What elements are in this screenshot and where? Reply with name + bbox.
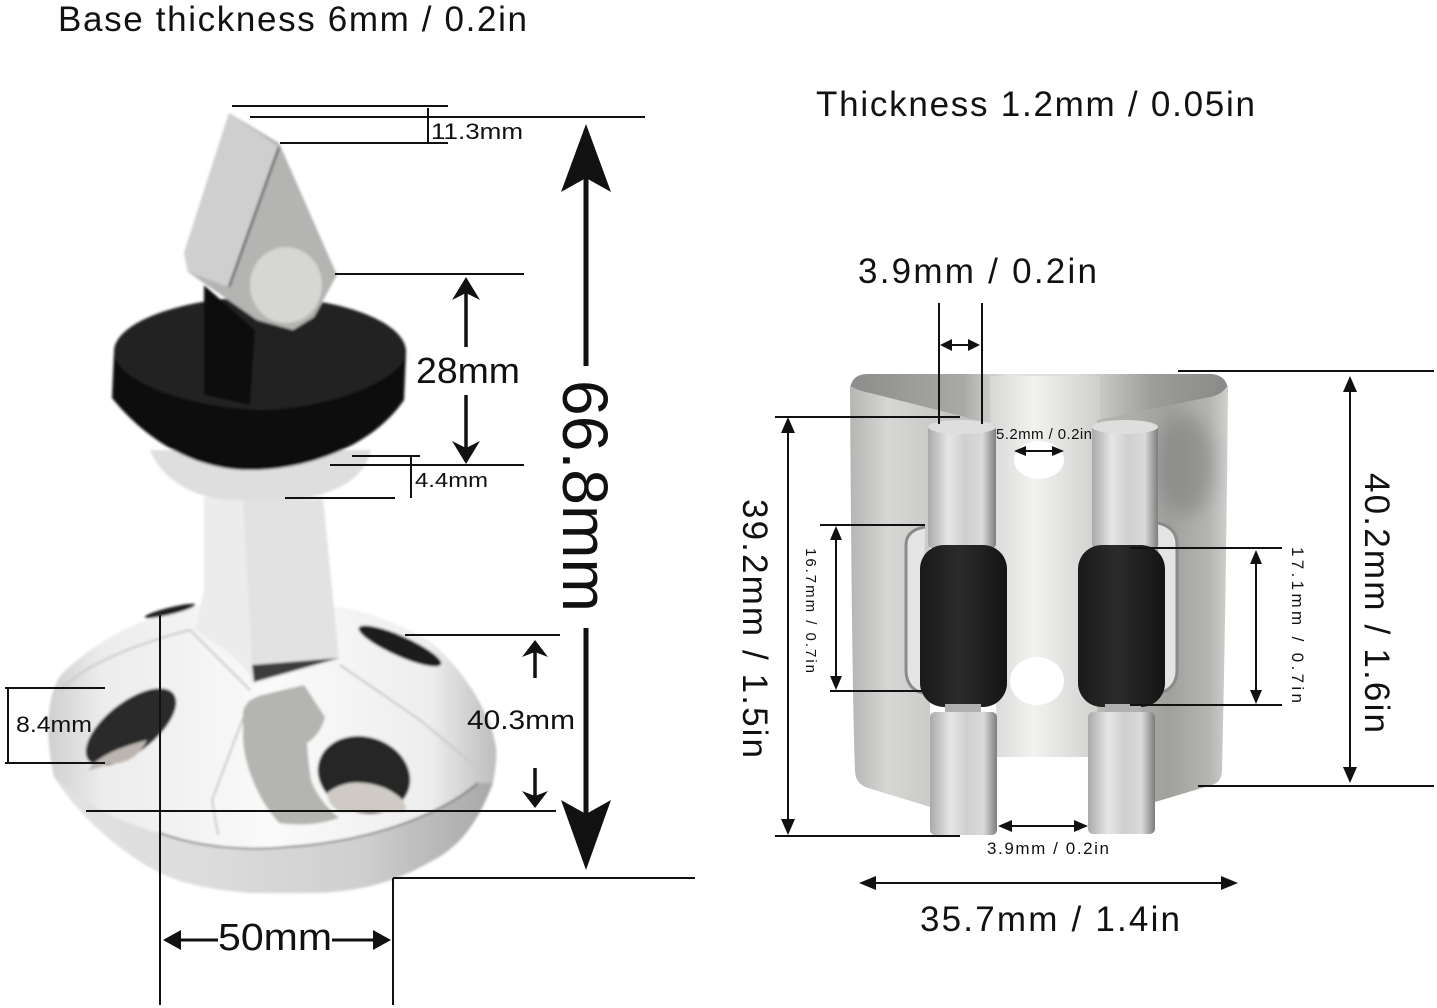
left roller [920,420,1007,835]
right slot [1158,523,1177,693]
clip dimension labels: 5.2mm / 0.2in [996,426,1092,443]
shaft front face [243,500,339,665]
rubber washer [112,297,406,470]
stud arrowheads [163,124,611,950]
stud neck [204,285,255,405]
clip dimension labels: 40.2mm / 1.6in [1357,473,1396,733]
stud dimension labels: 40.3mm [467,705,575,735]
clip dimension labels: 35.7mm / 1.4in [920,900,1180,939]
head light face [184,113,279,287]
clip dimension lines [775,303,1434,883]
stud dimension labels: 8.4mm [16,712,92,737]
base flange [54,777,493,893]
washer top [114,297,406,410]
clip dimension labels: 17.1mm / 0.7in [1288,547,1307,703]
stud dimension lines [5,106,695,1005]
base reflection [243,685,339,825]
head crease [229,147,279,287]
stud base [48,605,496,893]
clip dimension labels: 3.9mm / 0.2in [987,839,1109,858]
clip left wing [850,385,977,807]
heading: base thickness: Base thickness 6mm / 0.2in [58,0,527,39]
clip back plate [850,374,1228,757]
clip dimension labels: 3.9mm / 0.2in [858,252,1097,291]
stud dimension labels: 66.8mm [549,380,621,612]
stud dimension labels: 50mm [218,917,332,959]
clip dimension labels: 16.7mm / 0.7in [802,548,819,673]
stud dimension labels: 28mm [416,350,520,391]
head end circle [250,247,322,323]
right wing dark patch [1157,415,1213,515]
flange lip line [160,783,478,849]
stud shaft [195,497,339,684]
clip holes [1014,441,1064,479]
diamond head [184,113,337,330]
heading: thickness: Thickness 1.2mm / 0.05in [816,85,1255,124]
clip centre tab [990,376,1100,757]
clip dimension labels: 39.2mm / 1.5in [735,499,774,758]
stud collar [150,450,371,500]
product photo: clip [850,374,1228,835]
shaft dark band [252,658,339,682]
base holes [73,601,445,826]
right roller [1078,420,1165,834]
stud dimension labels: 11.3mm [431,119,523,144]
stud dimension labels [16,119,621,959]
left slot [906,527,925,693]
clip dimension labels [735,252,1396,939]
product photo: stud fastener [48,113,496,893]
clip arrowheads [781,339,1357,890]
base facets [60,630,480,835]
stud dimension labels: 4.4mm [415,470,488,492]
clip right wing [1097,385,1228,802]
